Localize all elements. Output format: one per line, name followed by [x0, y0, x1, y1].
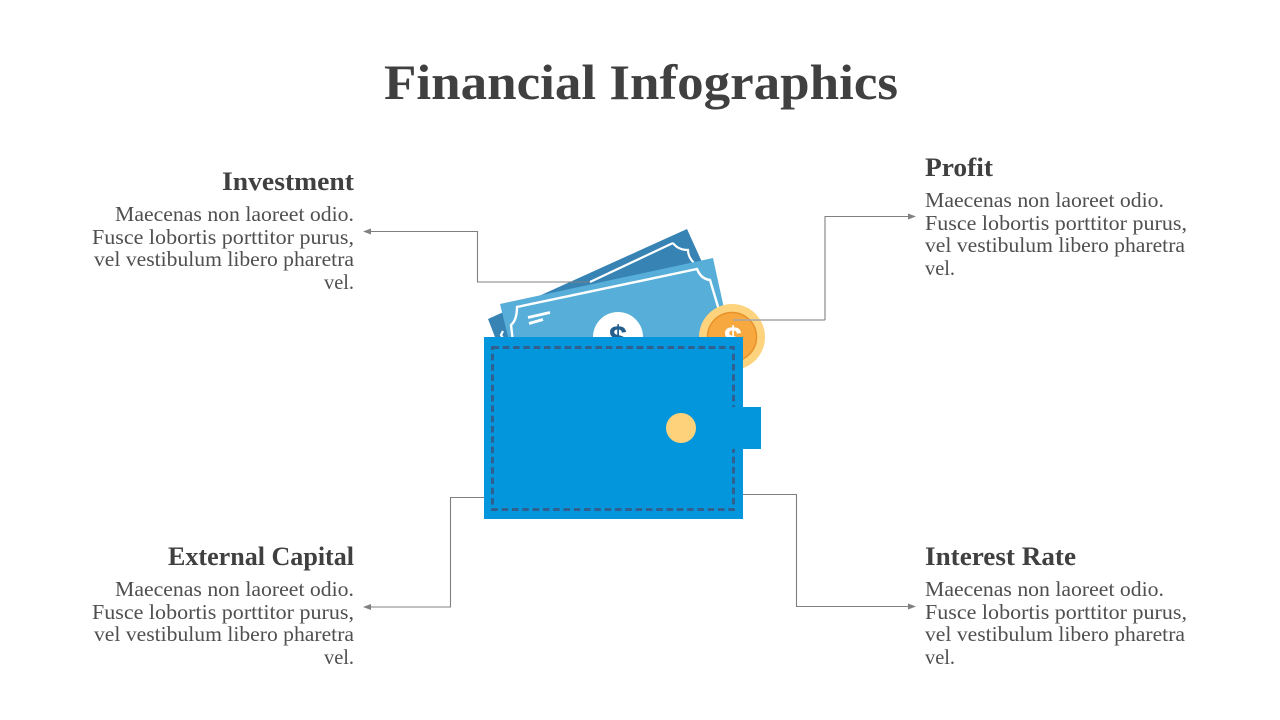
text block: investment: vel vestibulum libero pharetra — [94, 247, 355, 271]
text block: profit: Fusce lobortis porttitor purus, — [925, 211, 1187, 235]
arrow: external capital connector — [363, 498, 484, 610]
text block: external capital: Fusce lobortis porttitor purus, — [92, 600, 354, 624]
icon: gold coin: $ — [724, 320, 742, 357]
text block: interest rate: Interest Rate — [925, 542, 1076, 571]
text block: external capital: Maecenas non laoreet odio. — [115, 577, 354, 601]
text block: profit — [925, 153, 1187, 280]
icon: gold coin — [699, 304, 765, 370]
arrow: profit connector — [733, 214, 916, 320]
title: Financial Infographics — [384, 54, 898, 110]
text block: investment: vel. — [324, 270, 354, 294]
text block: interest rate — [925, 542, 1187, 669]
text block: profit: vel. — [925, 256, 955, 280]
icon: wallet with cash and coin — [484, 229, 765, 519]
text block: profit: Profit — [925, 153, 993, 182]
text block: investment: Fusce lobortis porttitor purus, — [92, 225, 354, 249]
text block: interest rate: Maecenas non laoreet odio. — [925, 577, 1164, 601]
text block: external capital: External Capital — [168, 542, 354, 571]
icon: back banknote — [488, 229, 735, 350]
text block: investment — [92, 167, 355, 294]
text block: investment: Investment — [222, 167, 354, 196]
arrow: investment connector — [363, 228, 590, 282]
text block: external capital: vel vestibulum libero pharetra — [94, 622, 355, 646]
icon: front banknote — [500, 258, 732, 362]
icon: wallet body — [484, 337, 761, 519]
arrow: interest rate connector — [743, 494, 916, 610]
text block: interest rate: vel vestibulum libero pharetra — [925, 622, 1186, 646]
icon: front banknote: $ — [609, 319, 627, 356]
text block: external capital — [92, 542, 355, 669]
text block: profit: vel vestibulum libero pharetra — [925, 233, 1186, 257]
text block: interest rate: vel. — [925, 645, 955, 669]
text block: external capital: vel. — [324, 645, 354, 669]
text block: investment: Maecenas non laoreet odio. — [115, 202, 354, 226]
text block: profit: Maecenas non laoreet odio. — [925, 188, 1164, 212]
text block: interest rate: Fusce lobortis porttitor purus, — [925, 600, 1187, 624]
